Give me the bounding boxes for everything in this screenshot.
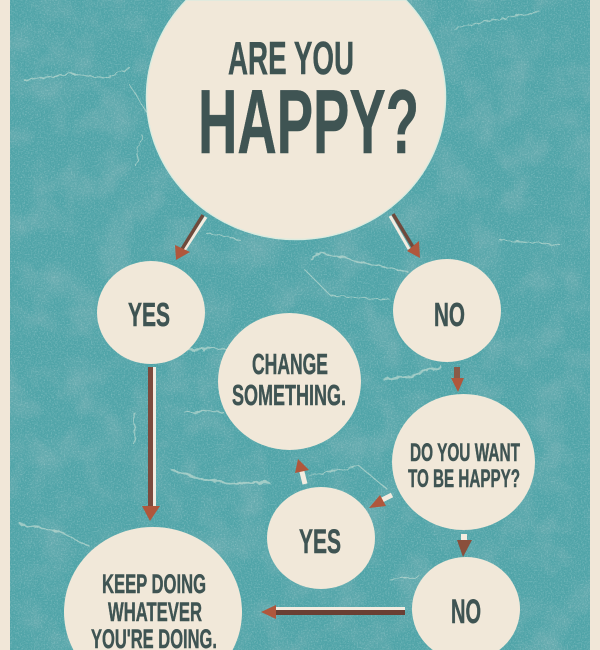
label: no: NO [434,296,465,333]
label: yes: YES [128,296,170,333]
label: do you want to be happy [408,439,520,493]
arrow: no to keep doing [261,605,405,619]
circle: keep doing whatever [64,527,242,650]
arrow: yes to keep doing [142,367,160,521]
label: keep doing whatever you're doing: WHATEVER [108,597,202,627]
arrow: no to do you want [451,367,464,392]
label: keep doing whatever you're doing: KEEP DOING [102,569,206,599]
label: change something: SOMETHING. [232,380,346,412]
label: change something [232,349,346,412]
circle: no [393,259,501,362]
label: change something: CHANGE [252,349,328,381]
arrow: yes to change something [295,459,309,484]
circle: do you want to be happy [392,394,535,530]
arrow: do you want to yes [369,495,392,508]
label: do you want to be happy: TO BE HAPPY? [408,465,520,493]
arrow: happy to yes [175,215,206,260]
circle: second yes [267,487,375,589]
label: second yes: YES [299,523,341,561]
circle: yes [97,261,205,364]
heading: are you: ARE YOU [228,32,354,84]
heading: happy: HAPPY? [198,72,419,173]
circle: change something [218,313,361,450]
label: second no: NO [451,593,481,631]
circle: are you happy [146,0,445,240]
label: do you want to be happy: DO YOU WANT [410,439,520,467]
label: keep doing whatever you're doing [91,569,217,650]
circle: second no [412,557,520,650]
arrow: do you want to no [457,534,472,557]
arrow: happy to no [390,214,420,258]
